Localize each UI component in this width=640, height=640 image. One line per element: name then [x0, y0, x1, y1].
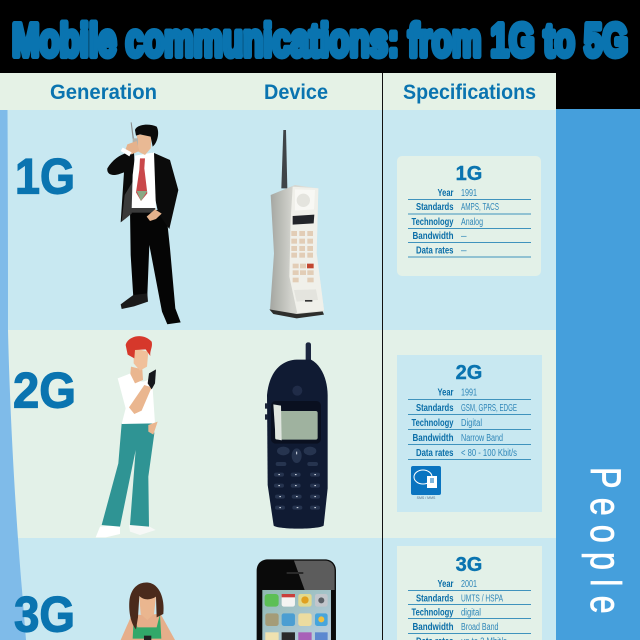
row: bandwidth: Bandwidth	[412, 231, 454, 242]
row: bandwidth	[412, 433, 503, 444]
figure: woman with red hair	[96, 336, 158, 537]
row: bandwidth: Bandwidth	[412, 622, 454, 633]
icon: SMS / MMS	[411, 466, 441, 500]
heading: specifications: Specifications	[403, 81, 536, 104]
label: people: People	[581, 467, 628, 623]
arm	[129, 385, 152, 414]
trousers	[102, 423, 154, 527]
row: standards: Standards	[416, 403, 454, 414]
panel: 2G row	[0, 330, 556, 538]
row: technology: Technology	[412, 217, 454, 228]
icon: SMS / MMS: SMS / MMS	[417, 496, 436, 500]
heading: generation: Generation	[50, 81, 157, 104]
row: data rates	[416, 636, 507, 640]
buttons	[274, 447, 320, 510]
app icons	[265, 594, 279, 607]
shirt	[132, 152, 156, 210]
row: year: 1991	[461, 188, 477, 199]
row: year	[438, 388, 477, 398]
tie	[136, 158, 147, 201]
hair	[126, 336, 152, 358]
jacket	[107, 152, 178, 229]
neck and face	[130, 367, 143, 383]
row: bandwidth: Broad Band	[461, 622, 498, 633]
keypad	[291, 231, 314, 282]
row: bandwidth: Narrow Band	[461, 433, 503, 444]
screen	[275, 411, 318, 440]
panel: 1G row	[0, 110, 556, 330]
panel: people side band	[556, 109, 640, 640]
row: standards	[416, 403, 517, 414]
row: standards: AMPS, TACS	[461, 202, 499, 213]
row: data rates: Data rates	[416, 246, 454, 256]
label: 2G: 2G	[13, 362, 76, 418]
trousers	[130, 210, 181, 324]
earpiece	[295, 189, 315, 211]
device: 3G smartphone	[257, 559, 336, 640]
belt	[131, 208, 155, 213]
figure: man with brick phone	[107, 122, 181, 324]
row: standards: Standards	[416, 594, 454, 604]
row: year: 2001	[461, 579, 477, 590]
phone	[131, 122, 134, 139]
row: data rates: –	[461, 246, 467, 256]
row: year	[438, 579, 477, 590]
panel: 1G specifications card	[397, 156, 541, 276]
head and hand	[137, 134, 152, 155]
panel: 3G row	[0, 538, 556, 640]
heading: device: Device	[264, 81, 328, 104]
row: year: 1991	[461, 388, 477, 398]
panel: 2G specifications card	[397, 355, 542, 512]
row: standards	[416, 594, 503, 604]
row: technology: digital	[461, 608, 481, 618]
base	[294, 289, 318, 302]
display	[293, 215, 314, 225]
column divider	[382, 73, 383, 640]
row: standards: Standards	[416, 202, 454, 213]
label: 1G: 1G	[15, 148, 75, 204]
row: technology: Analog	[461, 217, 483, 228]
panel: column headers	[0, 73, 556, 110]
row: data rates	[416, 448, 517, 459]
row: year	[438, 188, 477, 199]
row: year: Year	[438, 579, 454, 590]
card heading: 2G	[456, 362, 482, 384]
top	[118, 373, 155, 424]
shoes	[96, 525, 120, 537]
panel: 3G specifications card	[397, 546, 542, 640]
device: 2G candybar phone	[265, 342, 328, 529]
row: data rates: < 80 - 100 Kbit/s	[461, 448, 517, 459]
row: standards	[416, 202, 499, 213]
row: technology: Technology	[412, 418, 454, 429]
device: 1G brick phone	[269, 130, 324, 318]
row: standards: GSM, GPRS, EDGE	[461, 403, 517, 414]
card heading: 1G	[456, 163, 482, 185]
row: technology: Technology	[412, 608, 454, 618]
left timeline band	[0, 110, 26, 640]
row: bandwidth: –	[461, 231, 467, 242]
row: year: Year	[438, 388, 454, 398]
row: bandwidth	[412, 622, 498, 633]
row: bandwidth: Bandwidth	[412, 433, 454, 444]
figure: woman with brown hair	[121, 583, 175, 640]
row: standards: UMTS / HSPA	[461, 594, 503, 604]
row: technology: Digital	[461, 418, 482, 429]
row: data rates: Data rates	[416, 448, 454, 459]
phone	[148, 369, 156, 389]
hand in pocket	[147, 209, 162, 221]
row: year: Year	[438, 188, 454, 199]
card heading: 3G	[456, 554, 482, 576]
